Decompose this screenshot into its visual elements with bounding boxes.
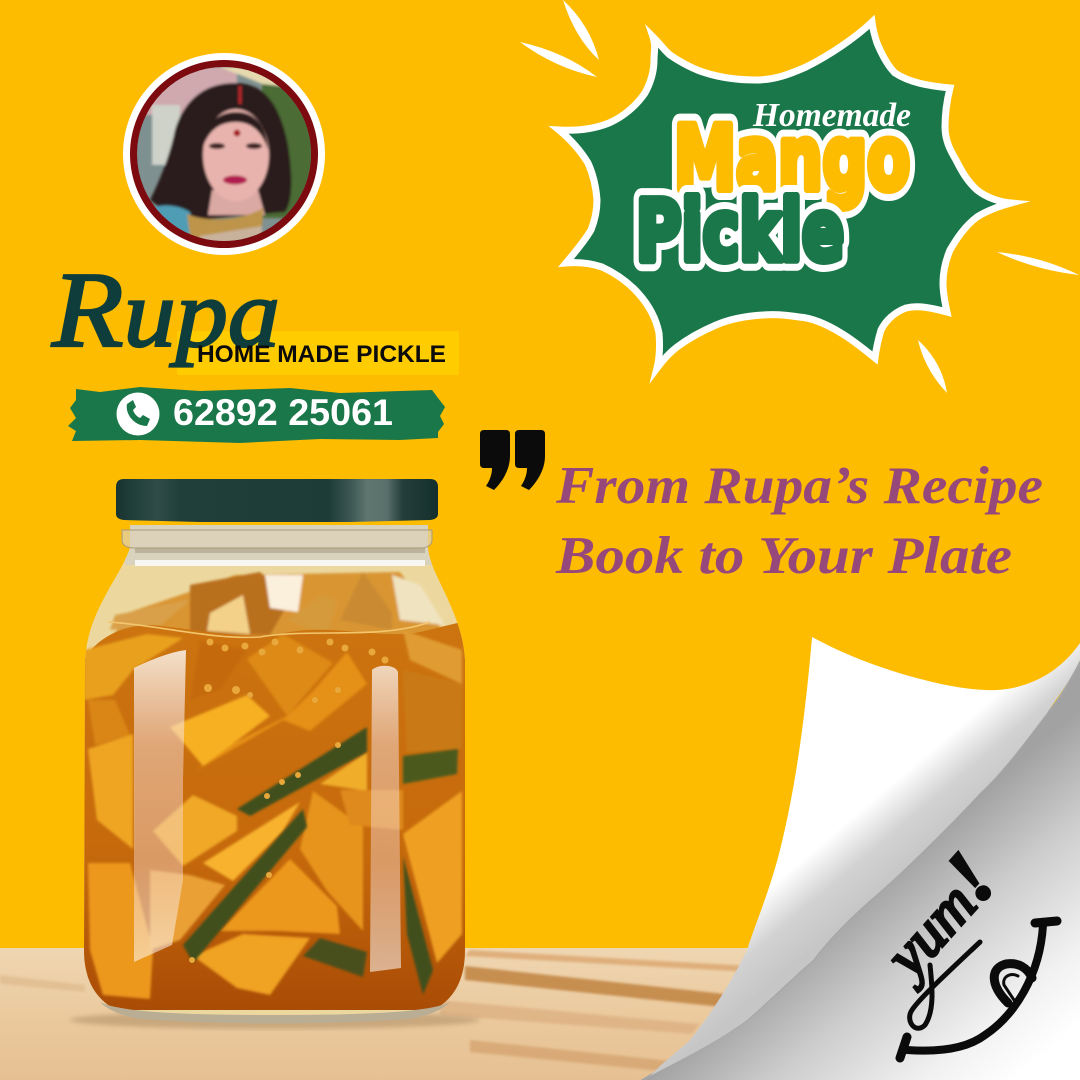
tagline: From Rupa’s Recipe xyxy=(555,457,1043,515)
logo tagline: HOME MADE PICKLE xyxy=(197,341,446,368)
wooden table xyxy=(0,948,750,1080)
yum text: yum! xyxy=(856,836,1012,996)
portrait badge xyxy=(123,53,325,255)
mustard seeds xyxy=(189,638,388,963)
jar neck ring xyxy=(122,530,432,548)
yum smile doodle xyxy=(856,836,1057,1058)
mango pieces above liquid xyxy=(110,572,450,640)
phone number: 62892 25061 xyxy=(173,392,393,433)
jar base glass xyxy=(100,1002,450,1024)
icon: phone xyxy=(116,392,160,436)
phone number brush banner xyxy=(68,387,445,443)
green chilli strips xyxy=(183,727,458,995)
jar shadow xyxy=(70,1011,480,1029)
jar lid xyxy=(116,479,438,522)
heading: Pickle: Pickle xyxy=(636,182,844,280)
revealed page xyxy=(636,655,1080,1080)
heading: Mango: Mango xyxy=(674,107,910,210)
heading: Homemade: Homemade xyxy=(752,97,911,134)
logo script: Rupa: Rupa xyxy=(51,251,280,370)
pickle liquid xyxy=(84,620,470,1010)
page curl xyxy=(636,637,1080,1080)
logo tag background xyxy=(177,331,459,375)
glass neck shading xyxy=(125,522,435,565)
sparks around starburst xyxy=(520,0,1079,393)
mango chunks xyxy=(84,630,462,999)
page flap xyxy=(650,637,1080,1076)
logo: Rupa Home Made Pickle xyxy=(51,251,459,375)
tagline xyxy=(555,457,1043,585)
liquid line xyxy=(108,622,430,637)
starburst badge: Homemade Mango Pickle xyxy=(559,22,1011,368)
quote mark xyxy=(480,430,545,490)
heading: Pickle: Pickle xyxy=(636,182,844,280)
pickle jar xyxy=(84,479,470,1024)
jar glass xyxy=(84,525,465,1023)
reflection bands xyxy=(134,650,401,972)
heading: Mango: Mango xyxy=(674,107,910,210)
smile xyxy=(900,921,1057,1058)
tagline: Book to Your Plate xyxy=(555,527,1012,585)
